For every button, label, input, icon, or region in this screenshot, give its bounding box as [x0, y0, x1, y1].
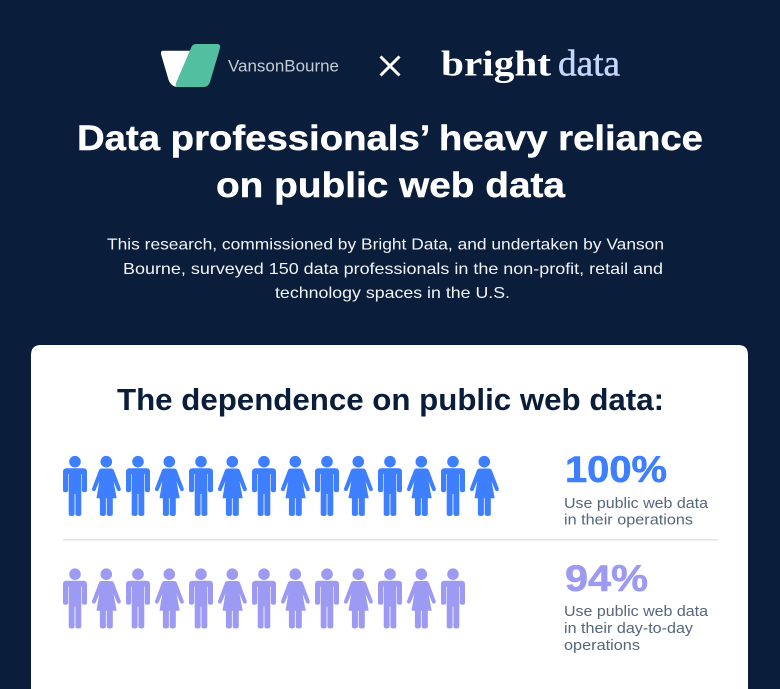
stat value: 94% [565, 558, 648, 599]
intro text: This research, commissioned by Bright Data, and undertaken by Vanson [107, 236, 664, 254]
stat description: in their day-to-day [564, 621, 694, 637]
panel background [31, 345, 748, 689]
logo: Bright Data [441, 44, 620, 84]
heading: The dependence on public web data: [117, 382, 664, 417]
stat description [564, 496, 709, 528]
pictogram: 100% of people [63, 456, 499, 516]
stat description: Use public web data [564, 604, 709, 620]
panel: dependence on public web data [31, 345, 748, 689]
pictogram: 94% of people [63, 568, 465, 628]
stat description: in their operations [564, 512, 693, 528]
intro text: Bourne, surveyed 150 data professionals in the non-profit, retail and [123, 261, 663, 278]
stat description: operations [564, 638, 640, 654]
intro text [107, 236, 664, 302]
wordmark: data: data [558, 44, 620, 84]
stat description [564, 604, 709, 654]
wordmark: bright: bright [441, 44, 551, 84]
stat: 100% [564, 449, 709, 528]
intro text: technology spaces in the U.S. [275, 285, 510, 302]
stat description: Use public web data [564, 496, 709, 512]
stat: 94% [564, 558, 709, 654]
title: Data professionals’ heavy reliance [77, 119, 703, 158]
title [77, 119, 703, 205]
logo: VansonBourne [161, 44, 339, 87]
wordmark: VansonBourne: VansonBourne [228, 58, 339, 76]
icon: cross between logos [380, 56, 400, 76]
stat value: 100% [565, 449, 667, 490]
icon: VansonBourne mark [161, 44, 220, 87]
title: on public web data [216, 166, 566, 205]
